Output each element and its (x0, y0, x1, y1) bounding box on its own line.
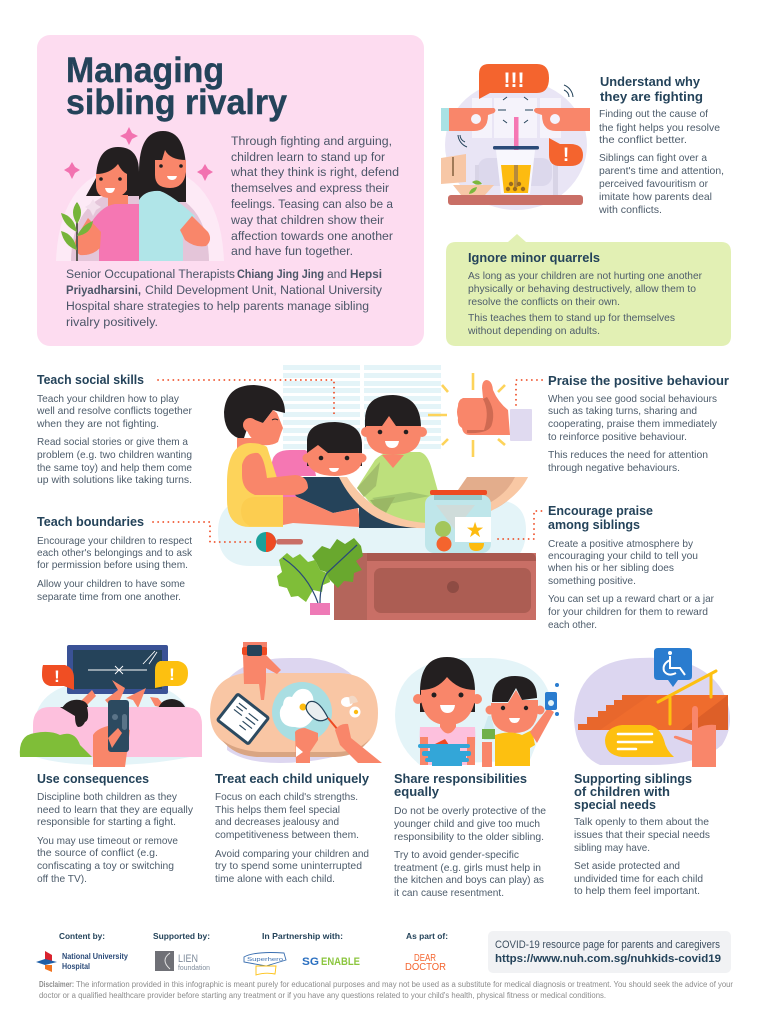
section: praise the positive behaviour: When you see good social behaviours (548, 394, 717, 405)
section: share responsibilities equally: younger child and give too much (394, 819, 540, 830)
panel: intro (37, 35, 424, 346)
callout: resource page (488, 931, 731, 973)
section: teach boundaries (37, 514, 193, 603)
footer: logos: In Partnership with: (262, 931, 343, 941)
text block: authors: rivalry positively. (66, 315, 158, 329)
potted plant (277, 538, 363, 615)
section: encourage praise among siblings: each other. (548, 620, 597, 631)
section: supporting siblings: Talk openly to them about the (574, 817, 709, 828)
logo: national university hospital: National University (62, 952, 129, 961)
section: teach social skills: Read social stories or give them a (37, 437, 188, 448)
section: supporting siblings: to help them feel important. (574, 886, 700, 897)
section: teach boundaries: for permission before using them. (37, 560, 188, 571)
panel: ignore minor quarrels: without depending on adults. (467, 326, 600, 337)
child one (224, 385, 359, 527)
text block: intro paragraph: feelings. Teasing can also be a (231, 197, 393, 211)
section: use consequences: off the TV). (37, 874, 87, 885)
text block: intro paragraph: children learn to stand up for (231, 150, 385, 164)
section: supporting siblings: special needs (574, 797, 656, 812)
section: praise the positive behaviour: such as taking turns, sharing and (548, 406, 697, 417)
child three (357, 395, 439, 525)
logo: lien foundation: foundation (178, 965, 210, 972)
icon: broken tv: ! (54, 667, 60, 686)
section: supporting siblings: Supporting siblings (574, 771, 692, 786)
cabinet (334, 553, 536, 620)
folded paper curve and laptop (339, 477, 528, 528)
panel: ignore minor quarrels: physically or behaving destructively, allow them to (468, 284, 696, 295)
logo: dear doctor (405, 953, 446, 973)
text block: authors: Priyadharsini, (66, 283, 141, 297)
logo: sg enable: ENABLE (321, 956, 360, 968)
logo: sg enable: SG (302, 956, 319, 968)
section: share responsibilities equally: the kitchen and boys can play) as (394, 875, 544, 886)
section: share responsibilities equally (394, 771, 546, 899)
illustration: three children playing (218, 365, 536, 620)
footer: logos: Supported by: (153, 931, 210, 941)
section: supporting siblings: Set aside protected and (574, 861, 680, 872)
disclaimer (39, 980, 733, 1000)
icon: rattle (256, 532, 303, 552)
connector: encourage praise (498, 511, 543, 539)
section: treat each child uniquely: competitiveness between them. (215, 830, 359, 841)
text block: understand why: Finding out the cause of (599, 109, 708, 120)
logo: dear doctor: DOCTOR (405, 962, 446, 973)
section: treat each child uniquely (215, 771, 370, 885)
section: treat each child uniquely: This helps them feel special (215, 805, 340, 816)
title (66, 51, 288, 122)
section: teach social skills: problem (e.g. two children wanting (37, 450, 192, 461)
icon: two sisters back to back (56, 127, 224, 261)
section: teach social skills: up with solutions like taking turns. (37, 475, 192, 486)
text block: understand why: with conflicts. (598, 205, 662, 216)
text block: understand why: perceived favouritism or (599, 179, 709, 190)
title: sibling rivalry (66, 83, 288, 122)
section: use consequences: the source of conflict (e.g. (37, 848, 158, 859)
section: use consequences: confiscating a toy or switching (37, 861, 174, 872)
text block: understand why: the fight helps you resolve (599, 123, 720, 134)
section: teach boundaries: each other's belongings and to ask (37, 548, 193, 559)
logo: superhero: Superhero (247, 957, 283, 963)
section: treat each child uniquely: and decreases jealousy and (215, 817, 339, 828)
section: share responsibilities equally: Share responsibilities (394, 771, 527, 786)
logo: superhero (244, 952, 286, 975)
section: encourage praise among siblings (547, 503, 715, 631)
section: praise the positive behaviour: through negative behaviours. (548, 463, 680, 474)
callout: resource page: COVID-19 resource page for parents and caregivers (495, 939, 720, 951)
section: praise the positive behaviour: cooperating, praise them immediately (548, 419, 718, 430)
logo: dear doctor: DEAR (414, 953, 436, 964)
text block: authors (66, 267, 383, 329)
section: supporting siblings: undivided time for each child (574, 874, 703, 885)
section: treat each child uniquely: try to spend some uninterrupted (215, 861, 362, 872)
section: encourage praise among siblings: when his or her sibling does (547, 563, 674, 574)
icon: thumbs up with rays (428, 373, 532, 457)
text block: understand why: parent's time and attention, (599, 166, 724, 177)
icon: broken tv: ! (169, 665, 175, 684)
disclaimer: doctor or a qualified healthcare provider before starting any treatment or if you have any questions related to your child's health, physical fitness or medical conditions. (39, 991, 606, 1000)
title: Managing (66, 51, 224, 90)
section: teach boundaries: separate time from one another. (37, 592, 181, 603)
icon: reward jar (425, 490, 491, 553)
section: encourage praise among siblings: encouraging your child to tell you (548, 551, 698, 562)
icon: broken tv (20, 645, 202, 767)
icon: fight over a drink: ! (563, 145, 569, 166)
text block: authors: Hospital share strategies to help parents manage sibling (66, 299, 369, 313)
icon: fight over a drink (441, 64, 590, 210)
text block: intro paragraph: themselves and express their (231, 181, 389, 195)
text block: intro paragraph: Through fighting and arguing, (231, 134, 392, 148)
callout: resource page: https://www.nuh.com.sg/nuhkids-covid19 (495, 953, 721, 965)
section: treat each child uniquely: Treat each child uniquely (215, 771, 370, 786)
text block: intro paragraph: and have fun together. (231, 244, 353, 258)
logo: national university hospital: Hospital (62, 962, 90, 971)
section: praise the positive behaviour: Praise the positive behaviour (548, 373, 729, 388)
section: encourage praise among siblings: something positive. (548, 576, 636, 587)
section: share responsibilities equally: it can cause resentment. (394, 888, 504, 899)
section: share responsibilities equally: treatment (e.g. girls must help in (394, 863, 541, 874)
panel: ignore minor quarrels: This teaches them to stand up for themselves (468, 313, 675, 324)
section: supporting siblings: issues that their special needs (574, 830, 710, 841)
logo: lien foundation: LIEN (178, 953, 198, 965)
section: encourage praise among siblings: among siblings (548, 517, 640, 532)
section: encourage praise among siblings: for your children for them to reward (548, 607, 708, 618)
section: teach social skills: the same toy) and help them come (37, 463, 192, 474)
heading: understand why (600, 74, 703, 104)
logo: sg enable (302, 956, 360, 968)
heading: understand why: they are fighting (600, 89, 703, 104)
section: teach boundaries: Encourage your children to respect (37, 536, 192, 547)
text block: understand why: imitate how parents deal (599, 192, 712, 203)
logo: lien foundation (155, 951, 210, 972)
section: supporting siblings (574, 771, 710, 897)
connector: teach social skills (158, 380, 334, 415)
section: teach boundaries: Teach boundaries (37, 514, 144, 529)
section: supporting siblings: of children with (574, 784, 670, 799)
section: teach social skills (36, 372, 193, 486)
section: encourage praise among siblings: Encourage praise (548, 503, 653, 518)
section: treat each child uniquely: Avoid comparing your children and (215, 849, 369, 860)
text block: intro paragraph: affection towards one another (231, 229, 393, 243)
footer: logos (36, 931, 448, 975)
disclaimer: The information provided in this infographic is meant purely for educational purposes and may not be used as a substitute for medical diagnosis or treatment. You should seek the advice of your (76, 980, 733, 989)
section: praise the positive behaviour: to reinforce positive behaviour. (548, 432, 687, 443)
icon: children washing dishes (395, 657, 559, 767)
pink pillow (272, 450, 316, 497)
text block: authors: Chiang Jing Jing (237, 267, 324, 281)
connector: praise (516, 380, 543, 405)
section: understand why (598, 74, 724, 216)
section: supporting siblings: sibling may have. (574, 843, 650, 854)
text block: authors: and (327, 267, 347, 281)
section: teach boundaries: Allow your children to have some (37, 579, 185, 590)
child two (302, 422, 366, 476)
footer: logos: As part of: (406, 931, 448, 941)
icon: fight over a drink: !!! (504, 69, 524, 92)
footer: logos: Content by: (59, 931, 105, 941)
text block: authors: Hepsi (350, 267, 382, 281)
section: use consequences: need to learn that they are equally (37, 805, 194, 816)
section: share responsibilities equally: Try to avoid gender-specific (394, 850, 519, 861)
section: share responsibilities equally: equally (394, 784, 440, 799)
icon: cooking table (210, 642, 382, 763)
text block: understand why: Siblings can fight over a (599, 153, 707, 164)
section: use consequences: responsible for starting a fight. (37, 817, 176, 828)
disclaimer: Disclaimer: (39, 980, 74, 989)
section: use consequences: Discipline both children as they (37, 792, 178, 803)
panel: ignore minor quarrels: resolve the conflicts on their own. (468, 297, 620, 308)
section: teach social skills: Teach social skills (37, 372, 144, 387)
icon: stairs and ramp with wheelchair sign (574, 648, 730, 767)
text block: intro paragraph: what they think is right, defend (230, 165, 399, 179)
section: treat each child uniquely: time alone with each child. (215, 874, 335, 885)
panel: ignore minor quarrels (446, 234, 731, 346)
text block: intro paragraph: way that children show their (230, 213, 384, 227)
section: share responsibilities equally: Do not be overly protective of the (394, 806, 546, 817)
section: teach social skills: well and resolve conflicts together (36, 406, 193, 417)
section: share responsibilities equally: responsibility to the older sibling. (394, 832, 544, 843)
section: use consequences (37, 771, 194, 885)
section: treat each child uniquely: Focus on each child's strengths. (215, 792, 358, 803)
panel: ignore minor quarrels: Ignore minor quarrels (468, 250, 600, 265)
text block: authors: Senior Occupational Therapists (66, 267, 235, 281)
section: praise the positive behaviour (548, 373, 729, 474)
text block: authors: Child Development Unit, National University (145, 283, 383, 297)
logo: national university hospital (36, 951, 129, 972)
text block: understand why: the conflict better. (599, 135, 687, 146)
section: use consequences: Use consequences (37, 771, 149, 786)
connector: teach boundaries (153, 522, 252, 542)
section: teach social skills: when they are not fighting. (36, 419, 159, 430)
icon: reward jar: ★ (466, 519, 484, 542)
section: encourage praise among siblings: Create a positive atmosphere by (548, 539, 694, 550)
text block: understand why (598, 109, 724, 216)
section: use consequences: You may use timeout or remove (37, 836, 178, 847)
text block: intro paragraph (230, 134, 399, 258)
section: encourage praise among siblings: You can set up a reward chart or a jar (548, 594, 715, 605)
section: teach social skills: Teach your children how to play (37, 394, 180, 405)
navy trousers (278, 477, 427, 528)
heading: understand why: Understand why (600, 74, 701, 89)
panel: ignore minor quarrels: As long as your children are not hurting one another (468, 271, 703, 282)
section: praise the positive behaviour: This reduces the need for attention (548, 450, 708, 461)
